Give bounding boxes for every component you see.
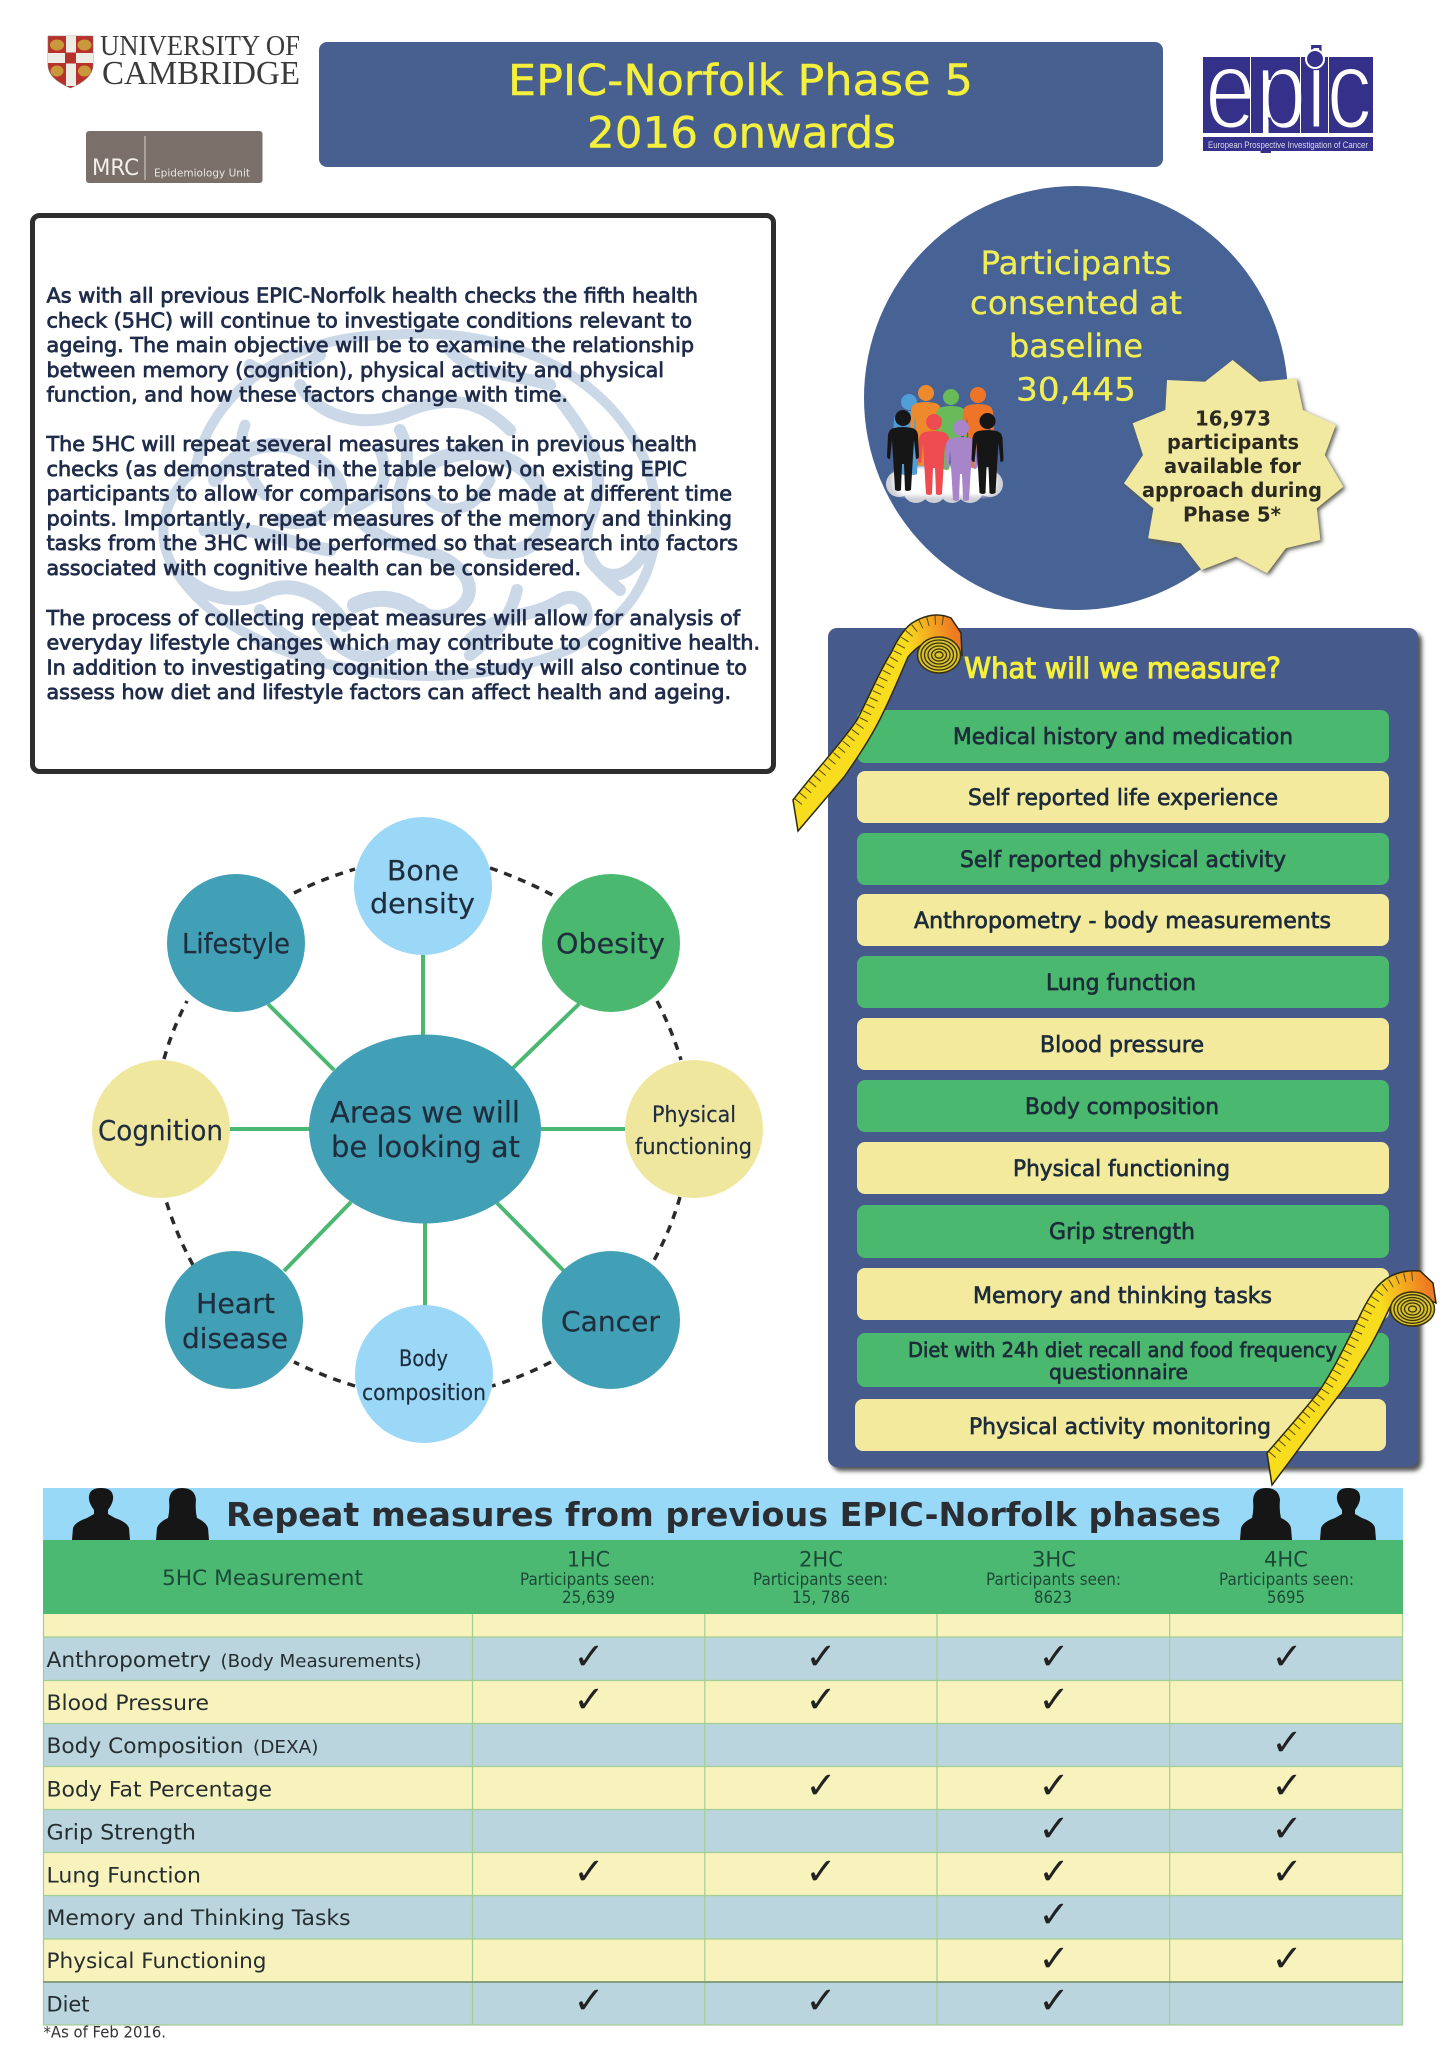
text: paragraph 3: The process of collecting repeat measures will allow for analysis of xyxy=(45,606,741,630)
table header row: 4HC xyxy=(1264,1548,1308,1572)
row: lung function: ✓ xyxy=(573,1850,605,1893)
row: body fat percentage: ✓ xyxy=(1271,1764,1303,1807)
icon: tape measure bottom xyxy=(1267,1271,1436,1485)
node: obesity: Obesity xyxy=(556,927,665,960)
node: centre: Areas we will xyxy=(330,1096,520,1130)
callout: star burst 16,973 participants: 16,973 xyxy=(1195,407,1271,431)
row: blood pressure: Blood pressure xyxy=(1040,1032,1204,1058)
row: anthropometry: Anthropometry xyxy=(46,1648,211,1673)
row: physical functioning: ✓ xyxy=(1038,1937,1070,1980)
row: physical functioning xyxy=(857,1142,1389,1194)
node: body composition: composition xyxy=(362,1381,486,1406)
callout: star burst 16,973 participants xyxy=(1124,360,1345,575)
text: university name: UNIVERSITY OF xyxy=(100,30,300,62)
row: lung function: ✓ xyxy=(1271,1850,1303,1893)
row: blood pressure xyxy=(46,1678,1070,1721)
heading: what will we measure: What will we measure? xyxy=(964,652,1281,685)
row: physical activity monitoring xyxy=(855,1399,1386,1451)
table title band: Repeat measures from previous EPIC-Norfolk phases xyxy=(226,1495,1221,1534)
row: grip strength: ✓ xyxy=(1271,1807,1303,1850)
node: body composition: Body xyxy=(399,1347,448,1372)
row: physical activity monitoring: Physical activity monitoring xyxy=(969,1414,1271,1440)
row: anthropometry: (Body Measurements) xyxy=(220,1651,422,1672)
row: grip strength: Grip strength xyxy=(1049,1219,1195,1245)
row: lung function: Lung function xyxy=(1046,970,1196,996)
row: body fat percentage xyxy=(46,1764,1303,1807)
text: participants consented: baseline xyxy=(1009,327,1143,365)
row: anthropometry: ✓ xyxy=(805,1635,837,1678)
row: grip strength: ✓ xyxy=(1038,1807,1070,1850)
callout: star burst 16,973 participants: approach during xyxy=(1142,478,1322,502)
row: anthropometry: ✓ xyxy=(1271,1635,1303,1678)
row: diet: ✓ xyxy=(573,1979,605,2022)
logo: EPIC: epic xyxy=(1205,27,1372,152)
row: memory and thinking tasks: Memory and thinking tasks xyxy=(973,1283,1272,1309)
node: heart disease: Heart xyxy=(196,1287,275,1320)
text: paragraph 1: between memory (cognition), physical activity and physical xyxy=(46,358,664,382)
node: lifestyle xyxy=(167,874,305,1012)
text: participants consented: 30,445 xyxy=(1016,370,1136,408)
row: body composition: (DEXA) xyxy=(253,1737,318,1758)
diagram: areas we will be looking at xyxy=(92,817,763,1443)
row: lung function: Lung Function xyxy=(46,1864,201,1888)
text: university name xyxy=(100,30,300,92)
text: paragraph 2 xyxy=(45,432,738,580)
row: physical functioning: ✓ xyxy=(1271,1937,1303,1980)
row: body composition: Body Composition xyxy=(46,1734,243,1759)
table header row: 25,639 xyxy=(562,1588,615,1607)
node: physical functioning: functioning xyxy=(635,1135,752,1160)
node: heart disease: disease xyxy=(182,1322,288,1355)
row: grip strength xyxy=(857,1205,1389,1258)
row: diet: ✓ xyxy=(1038,1979,1070,2022)
node: cancer: Cancer xyxy=(561,1305,660,1338)
text: paragraph 2: points. Importantly, repeat measures of the memory and thinking xyxy=(46,506,732,530)
text: paragraph 3: everyday lifestyle changes which may contribute to cognitive health. xyxy=(46,631,760,655)
row: body fat percentage: ✓ xyxy=(1038,1764,1070,1807)
text: paragraph 3: In addition to investigating cognition the study will also continue to xyxy=(46,655,747,679)
text: university name: CAMBRIDGE xyxy=(102,55,300,92)
row: diet: Diet with 24h diet recall and food frequency xyxy=(908,1338,1337,1362)
table header row: 15, 786 xyxy=(792,1588,850,1607)
node: centre: be looking at xyxy=(331,1130,520,1164)
icon: shield xyxy=(48,36,93,88)
text: paragraph 1: check (5HC) will continue to investigate conditions relevant to xyxy=(46,308,692,332)
row: anthropometry xyxy=(46,1635,1303,1678)
table header row: 5695 xyxy=(1267,1588,1305,1607)
node: lifestyle: Lifestyle xyxy=(182,927,290,960)
text: paragraph 2: checks (as demonstrated in the table below) on existing EPIC xyxy=(46,457,687,481)
row: lung function xyxy=(857,956,1389,1008)
row: memory and thinking tasks: Memory and Thinking Tasks xyxy=(46,1906,350,1931)
row: physical functioning: Physical Functioning xyxy=(46,1949,266,1974)
logo: MRC Epidemiology Unit xyxy=(86,131,262,183)
row: diet xyxy=(46,1979,1070,2022)
text: paragraph 2: associated with cognitive health can be considered. xyxy=(46,556,581,580)
logo: EPIC: European Prospective Investigation of Cancer xyxy=(1208,140,1368,150)
text: paragraph 2: tasks from the 3HC will be performed so that research into factors xyxy=(46,531,738,555)
title banner: 2016 onwards xyxy=(587,110,896,158)
row: blood pressure xyxy=(857,1018,1389,1070)
text: participants consented: Participants xyxy=(980,244,1172,282)
node: cognition xyxy=(92,1060,230,1198)
table header row: 2HC xyxy=(799,1548,843,1572)
table header row: 1HC xyxy=(567,1548,610,1572)
row: lung function: ✓ xyxy=(1038,1850,1070,1893)
row: diet: questionnaire xyxy=(1049,1360,1188,1384)
table header row: 3HC xyxy=(1032,1548,1076,1572)
row: self reported life experience xyxy=(857,771,1389,823)
icon: tape roll xyxy=(1390,1292,1434,1326)
table header row xyxy=(43,1540,1403,1614)
row: blood pressure: ✓ xyxy=(1038,1678,1070,1721)
row: anthropometry: ✓ xyxy=(573,1635,605,1678)
row: lung function: ✓ xyxy=(805,1850,837,1893)
node: cancer xyxy=(542,1251,680,1389)
row: diet xyxy=(857,1333,1389,1387)
icon: tape measure top xyxy=(793,615,962,831)
logo: MRC Epidemiology Unit: MRC xyxy=(92,156,139,181)
row: anthropometry: Anthropometry - body measurements xyxy=(914,908,1331,934)
row: physical functioning: Physical functioning xyxy=(1013,1156,1230,1182)
node: bone density: density xyxy=(370,887,475,920)
text: paragraph 1: As with all previous EPIC-Norfolk health checks the fifth health xyxy=(46,284,698,308)
icon: tape roll xyxy=(918,637,960,673)
row: blood pressure: Blood Pressure xyxy=(46,1691,209,1716)
text: paragraph 2: participants to allow for comparisons to be made at different time xyxy=(46,482,732,506)
row: blood pressure: ✓ xyxy=(805,1678,837,1721)
logo: University of Cambridge xyxy=(48,30,300,92)
logo: MRC Epidemiology Unit: Epidemiology Unit xyxy=(154,166,251,180)
row: diet: Diet xyxy=(46,1992,90,2018)
text: paragraph 1: ageing. The main objective will be to examine the relationship xyxy=(46,333,694,357)
icon: group of people xyxy=(886,385,1004,503)
row: anthropometry: ✓ xyxy=(1038,1635,1070,1678)
row: body composition xyxy=(857,1080,1389,1132)
text: participants consented xyxy=(970,244,1182,408)
table header row: 5HC Measurement xyxy=(162,1566,363,1591)
row: grip strength xyxy=(46,1807,1303,1850)
callout: star burst 16,973 participants: Phase 5* xyxy=(1183,503,1282,527)
node: centre xyxy=(309,1034,541,1224)
row: body composition xyxy=(46,1721,1303,1764)
table header row: Participants seen: xyxy=(753,1570,888,1589)
row: anthropometry xyxy=(857,894,1389,946)
text: paragraph 3 xyxy=(45,606,760,704)
panel: what will we measure xyxy=(828,628,1422,1471)
row: body composition: Body composition xyxy=(1025,1094,1219,1120)
node: physical functioning: Physical xyxy=(652,1103,736,1128)
text: paragraph 1 xyxy=(46,284,698,406)
illustration: brain watermark xyxy=(164,334,656,676)
row: memory and thinking tasks: ✓ xyxy=(1038,1893,1070,1936)
row: body fat percentage: Body Fat Percentage xyxy=(46,1778,272,1802)
text: paragraph 2: The 5HC will repeat several measures taken in previous health xyxy=(45,432,697,456)
text: paragraph 3: assess how diet and lifestyle factors can affect health and ageing. xyxy=(46,680,731,704)
node: cognition: Cognition xyxy=(98,1114,223,1147)
table body stripes xyxy=(43,1614,1403,2025)
row: memory and thinking tasks xyxy=(857,1268,1389,1320)
table header row: Participants seen: xyxy=(986,1570,1121,1589)
row: physical functioning xyxy=(46,1937,1303,1980)
table: repeat measures xyxy=(43,1488,1403,2025)
row: self reported physical activity: Self reported physical activity xyxy=(960,847,1286,873)
footnote: *As of Feb 2016. xyxy=(44,2022,166,2042)
node: obesity xyxy=(542,874,680,1012)
row: self reported physical activity xyxy=(857,833,1389,885)
row: memory and thinking tasks xyxy=(46,1893,1070,1936)
node: bone density: Bone xyxy=(387,854,459,887)
row: blood pressure: ✓ xyxy=(573,1678,605,1721)
table header row: 8623 xyxy=(1034,1588,1072,1607)
node: body composition xyxy=(355,1305,493,1443)
row: grip strength: Grip Strength xyxy=(46,1820,196,1846)
title banner xyxy=(319,42,1163,167)
row: medical history: Medical history and medication xyxy=(953,724,1293,750)
text: paragraph 1: function, and how these factors change with time. xyxy=(46,382,568,406)
row: medical history xyxy=(857,710,1389,763)
row: lung function xyxy=(46,1850,1303,1893)
row: diet: ✓ xyxy=(805,1979,837,2022)
row: body composition: ✓ xyxy=(1271,1721,1303,1764)
panel: participants circle xyxy=(864,186,1345,610)
title banner: EPIC-Norfolk Phase 5 xyxy=(508,57,973,106)
node: heart disease xyxy=(165,1251,303,1389)
callout: star burst 16,973 participants: participants xyxy=(1167,430,1299,454)
node: bone density xyxy=(354,817,492,955)
node: physical functioning xyxy=(625,1060,763,1198)
row: body fat percentage: ✓ xyxy=(805,1764,837,1807)
callout: star burst 16,973 participants: available for xyxy=(1164,454,1301,478)
table header row: Participants seen: xyxy=(1219,1570,1354,1589)
table title band xyxy=(43,1488,1403,1540)
table header row: Participants seen: xyxy=(520,1570,655,1589)
text: participants consented: consented at xyxy=(970,284,1182,322)
row: self reported life experience: Self reported life experience xyxy=(968,785,1278,811)
panel: introduction text xyxy=(32,216,774,772)
